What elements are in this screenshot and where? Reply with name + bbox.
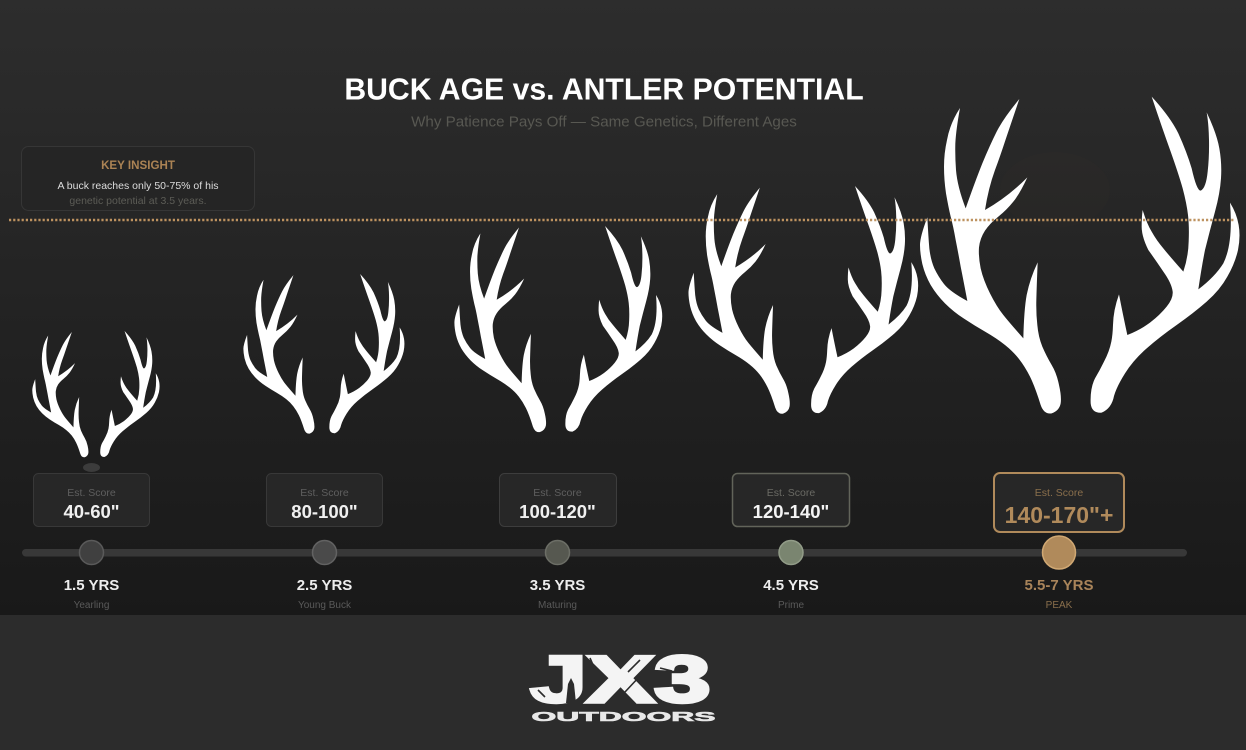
- small smudge under yearling antlers: [83, 463, 100, 472]
- antlers: 4.5 years: [688, 186, 918, 414]
- age: 4.5 YRS: [763, 577, 819, 594]
- stage: 3.5 years: [500, 474, 616, 611]
- logo wordmark: OUTDOORS: [532, 709, 716, 724]
- stage name: PEAK: [1046, 600, 1073, 611]
- callout heading: KEY INSIGHT: [101, 159, 175, 172]
- stage: 1.5 years: [34, 474, 150, 611]
- score value: 40-60": [63, 501, 120, 522]
- logo: JX3 Outdoors: [530, 642, 716, 724]
- score label: Est. Score: [533, 487, 582, 499]
- score value: 100-120": [519, 501, 596, 522]
- score label: Est. Score: [300, 487, 349, 499]
- callout: key insight: [22, 146, 254, 210]
- age: 1.5 YRS: [64, 577, 119, 594]
- score value: 120-140": [753, 501, 829, 522]
- stage name: Yearling: [74, 600, 109, 611]
- potential line: [9, 219, 1235, 221]
- title: BUCK AGE vs. ANTLER POTENTIAL: [344, 74, 864, 106]
- score box: [34, 474, 150, 526]
- timeline marker: [1042, 536, 1076, 569]
- antlers: 2.5 years: [243, 274, 404, 434]
- logo scratches: [538, 658, 672, 697]
- footer band: [0, 615, 1246, 750]
- timeline marker: [779, 540, 803, 564]
- stage: 4.5 years: [732, 474, 850, 611]
- age: 2.5 YRS: [297, 577, 352, 594]
- score label: Est. Score: [767, 487, 815, 499]
- score box: [732, 474, 850, 526]
- score label: Est. Score: [1035, 487, 1083, 499]
- hunter silhouette cut into logo: [566, 678, 576, 703]
- timeline marker: [80, 540, 104, 564]
- timeline marker: [312, 540, 336, 564]
- age: 5.5-7 YRS: [1025, 577, 1093, 594]
- faint deer head silhouette: [1000, 152, 1110, 228]
- timeline marker: [546, 540, 570, 564]
- logo mark: JX3: [530, 642, 710, 716]
- score box: [266, 474, 382, 526]
- callout text line 2: genetic potential at 3.5 years.: [69, 195, 207, 207]
- stage name: Young Buck: [298, 600, 352, 611]
- antlers: 5.5-7 years: [920, 97, 1240, 413]
- callout text line 1: A buck reaches only 50-75% of his: [57, 180, 219, 192]
- age: 3.5 YRS: [530, 577, 585, 594]
- antlers: 3.5 years: [454, 226, 662, 432]
- score box: [500, 474, 616, 526]
- antlers: 1.5 years: [32, 331, 160, 457]
- stage name: Prime: [778, 600, 804, 611]
- subtitle: Why Patience Pays Off — Same Genetics, Different Ages: [411, 114, 797, 130]
- score label: Est. Score: [67, 487, 116, 499]
- score box: [994, 473, 1124, 532]
- stage name: Maturing: [538, 600, 577, 611]
- timeline track: [22, 549, 1187, 556]
- stage: 2.5 years: [266, 474, 382, 611]
- score value: 140-170"+: [1005, 502, 1113, 528]
- score value: 80-100": [291, 501, 358, 522]
- stage: 5.5-7 years peak: [994, 473, 1124, 611]
